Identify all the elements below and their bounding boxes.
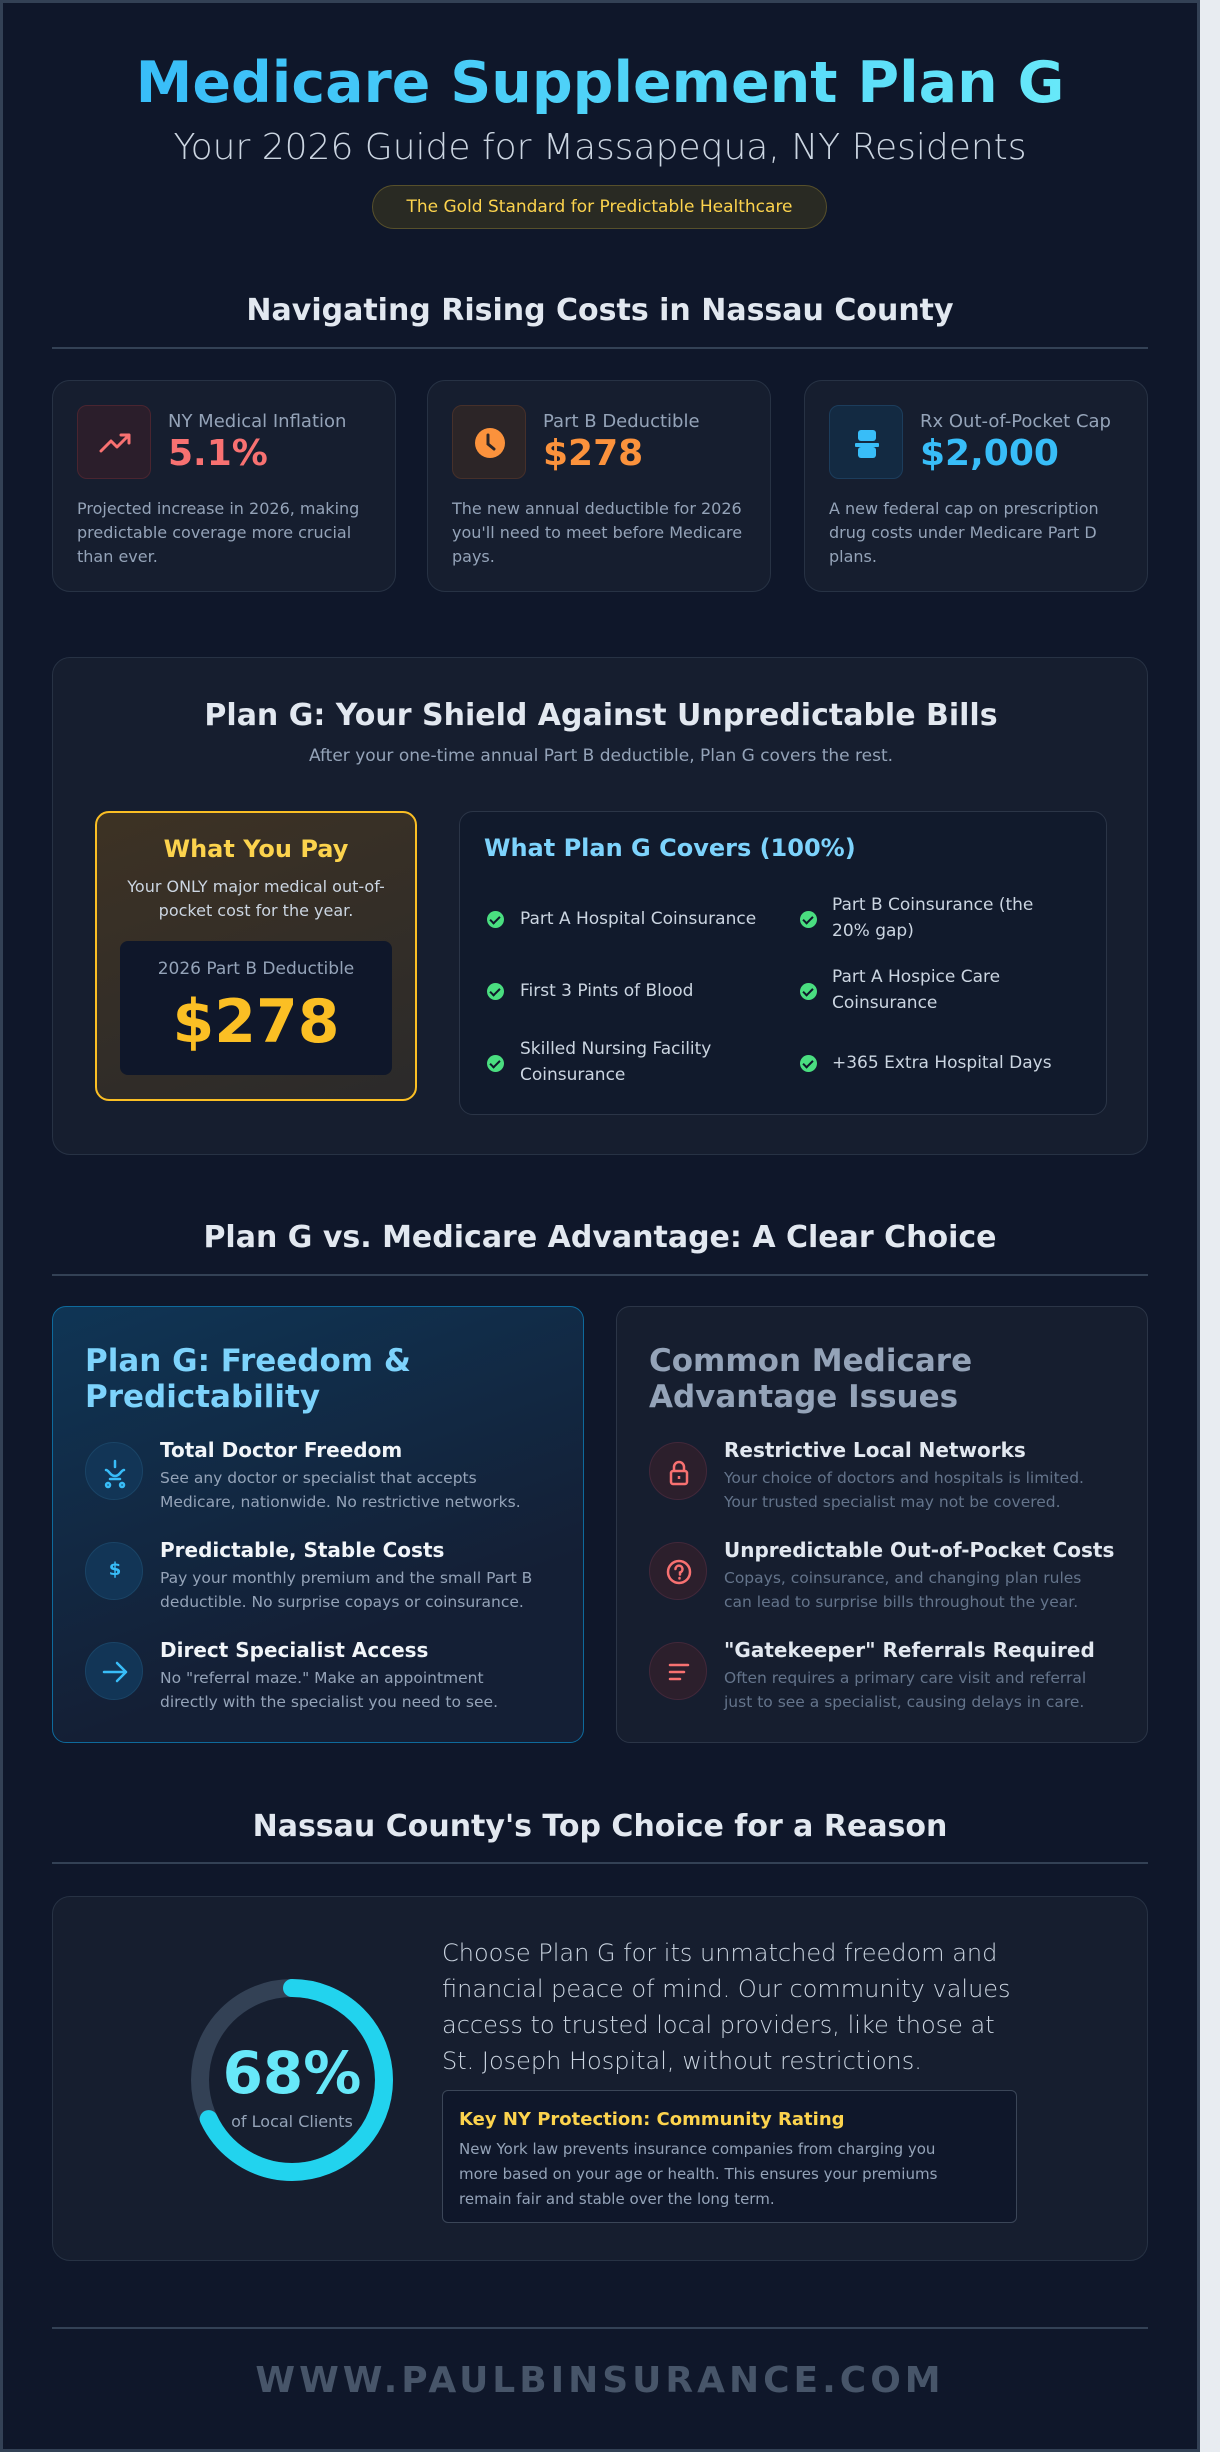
badge <box>372 185 827 229</box>
panel: medicare advantage issues: Restrictive Local Networks <box>724 1438 1026 1462</box>
panel: medicare advantage issues: Common Medicare <box>649 1343 972 1379</box>
donut chart 68%: of Local Clients <box>231 2112 353 2131</box>
box: what plan g covers <box>459 811 1107 1115</box>
panel: plan g freedom: Plan G: Freedom & <box>85 1343 411 1379</box>
deductible box <box>120 941 392 1075</box>
panel: medicare advantage issues: Copays, coinsurance, and changing plan rules can lead to surprise bills throughout the year. <box>724 1569 1081 1611</box>
card: part b: The new annual deductible for 2026 you'll need to meet before Medicare pays. <box>452 499 742 566</box>
panel: plan g freedom: Direct Specialist Access <box>160 1638 428 1662</box>
heading: rising costs: Navigating Rising Costs in Nassau County <box>246 293 954 328</box>
panel subtitle: After your one-time annual Part B deductible, Plan G covers the rest. <box>309 746 893 766</box>
panel: medicare advantage issues: Your choice of doctors and hospitals is limited. Your trusted specialist may not be covered. <box>724 1469 1084 1511</box>
item: unpredictable costs <box>649 1538 1114 1611</box>
card: part b <box>427 380 771 592</box>
card: inflation: Projected increase in 2026, making predictable coverage more crucial than ever. <box>77 499 359 566</box>
card: inflation: NY Medical Inflation <box>168 411 346 432</box>
card: inflation <box>52 380 396 592</box>
panel: plan g freedom: Predictable, Stable Costs <box>160 1538 444 1562</box>
heading: top choice: Nassau County's Top Choice for a Reason <box>253 1809 947 1844</box>
box: what plan g covers: What Plan G Covers (100%) <box>484 834 856 862</box>
panel: plan g freedom: Predictability <box>85 1379 320 1415</box>
item: gatekeeper <box>649 1638 1095 1711</box>
box: what you pay: What You Pay <box>164 835 348 863</box>
box: what you pay <box>95 811 417 1101</box>
paragraph: Choose Plan G for its unmatched freedom and financial peace of mind. Our community values access to trusted local providers, like those at St. Joseph Hospital, without restrictions. <box>442 1939 1011 2075</box>
panel: plan g freedom: Pay your monthly premium and the small Part B deductible. No surprise copays or coinsurance. <box>160 1569 532 1611</box>
card: part b: $278 <box>543 433 643 474</box>
box: what you pay: Your ONLY major medical out-of-pocket cost for the year. <box>127 877 385 920</box>
box: what plan g covers: Part A Hospital Coinsurance <box>520 909 756 929</box>
panel heading: Plan G: Your Shield Against Unpredictable Bills <box>204 698 998 733</box>
heading: comparison: Plan G vs. Medicare Advantage: A Clear Choice <box>203 1220 997 1255</box>
box: what plan g covers: Skilled Nursing Facility Coinsurance <box>520 1039 711 1085</box>
box: what plan g covers: First 3 Pints of Blood <box>520 981 693 1001</box>
panel: plan g freedom: $ <box>109 1559 121 1580</box>
panel: medicare advantage issues <box>616 1306 1148 1743</box>
panel: plan g freedom <box>52 1306 584 1743</box>
icon: clock <box>452 405 526 479</box>
panel: medicare advantage issues: Unpredictable Out-of-Pocket Costs <box>724 1538 1114 1562</box>
callout: community rating <box>442 2090 1017 2223</box>
panel: medicare advantage issues: Often requires a primary care visit and referral just to see a specialist, causing delays in care. <box>724 1669 1086 1711</box>
box: what plan g covers: Part A Hospice Care Coinsurance <box>832 967 1000 1013</box>
panel: plan g freedom: No "referral maze." Make an appointment directly with the specialist you need to see. <box>160 1669 498 1711</box>
card: part b: Part B Deductible <box>543 411 700 432</box>
panel: plan g freedom: Total Doctor Freedom <box>160 1438 402 1462</box>
item: stable costs <box>85 1538 532 1611</box>
item: specialist access <box>85 1638 498 1711</box>
donut chart 68%: 68% <box>223 2039 361 2107</box>
deductible box: 2026 Part B Deductible <box>158 959 354 979</box>
box: what plan g covers: Part B Coinsurance (the 20% gap) <box>832 895 1033 941</box>
card: rx cap: Rx Out-of-Pocket Cap <box>920 411 1111 432</box>
callout: community rating: Key NY Protection: Community Rating <box>459 2109 845 2130</box>
panel: plan g freedom: See any doctor or specialist that accepts Medicare, nationwide. No restrictive networks. <box>160 1469 521 1511</box>
icon: pill bottle <box>829 405 903 479</box>
box: what plan g covers: +365 Extra Hospital Days <box>832 1053 1052 1073</box>
panel: plan g shield <box>52 657 1148 1155</box>
subtitle: Your 2026 Guide for Massapequa, NY Residents <box>173 127 1027 168</box>
title: Medicare Supplement Plan G <box>136 50 1064 116</box>
icon: trend up <box>77 405 151 479</box>
footer url: WWW.PAULBINSURANCE.COM <box>255 2360 945 2401</box>
callout: community rating: New York law prevents insurance companies from charging you more based on your age or health. This ensures your premiums remain fair and stable over the long term. <box>459 2140 937 2208</box>
item: networks <box>649 1438 1084 1511</box>
card: rx cap: A new federal cap on prescription drug costs under Medicare Part D plans. <box>829 499 1099 566</box>
panel: top choice <box>52 1896 1148 2261</box>
donut chart 68% <box>191 1979 393 2181</box>
panel: medicare advantage issues: "Gatekeeper" Referrals Required <box>724 1638 1095 1662</box>
deductible box: $278 <box>172 987 340 1057</box>
badge: The Gold Standard for Predictable Healthcare <box>406 197 793 217</box>
card: rx cap: $2,000 <box>920 433 1059 474</box>
item: doctor freedom <box>85 1438 521 1511</box>
card: inflation: 5.1% <box>168 433 268 474</box>
panel: medicare advantage issues: Advantage Issues <box>649 1379 958 1415</box>
card: rx cap <box>804 380 1148 592</box>
